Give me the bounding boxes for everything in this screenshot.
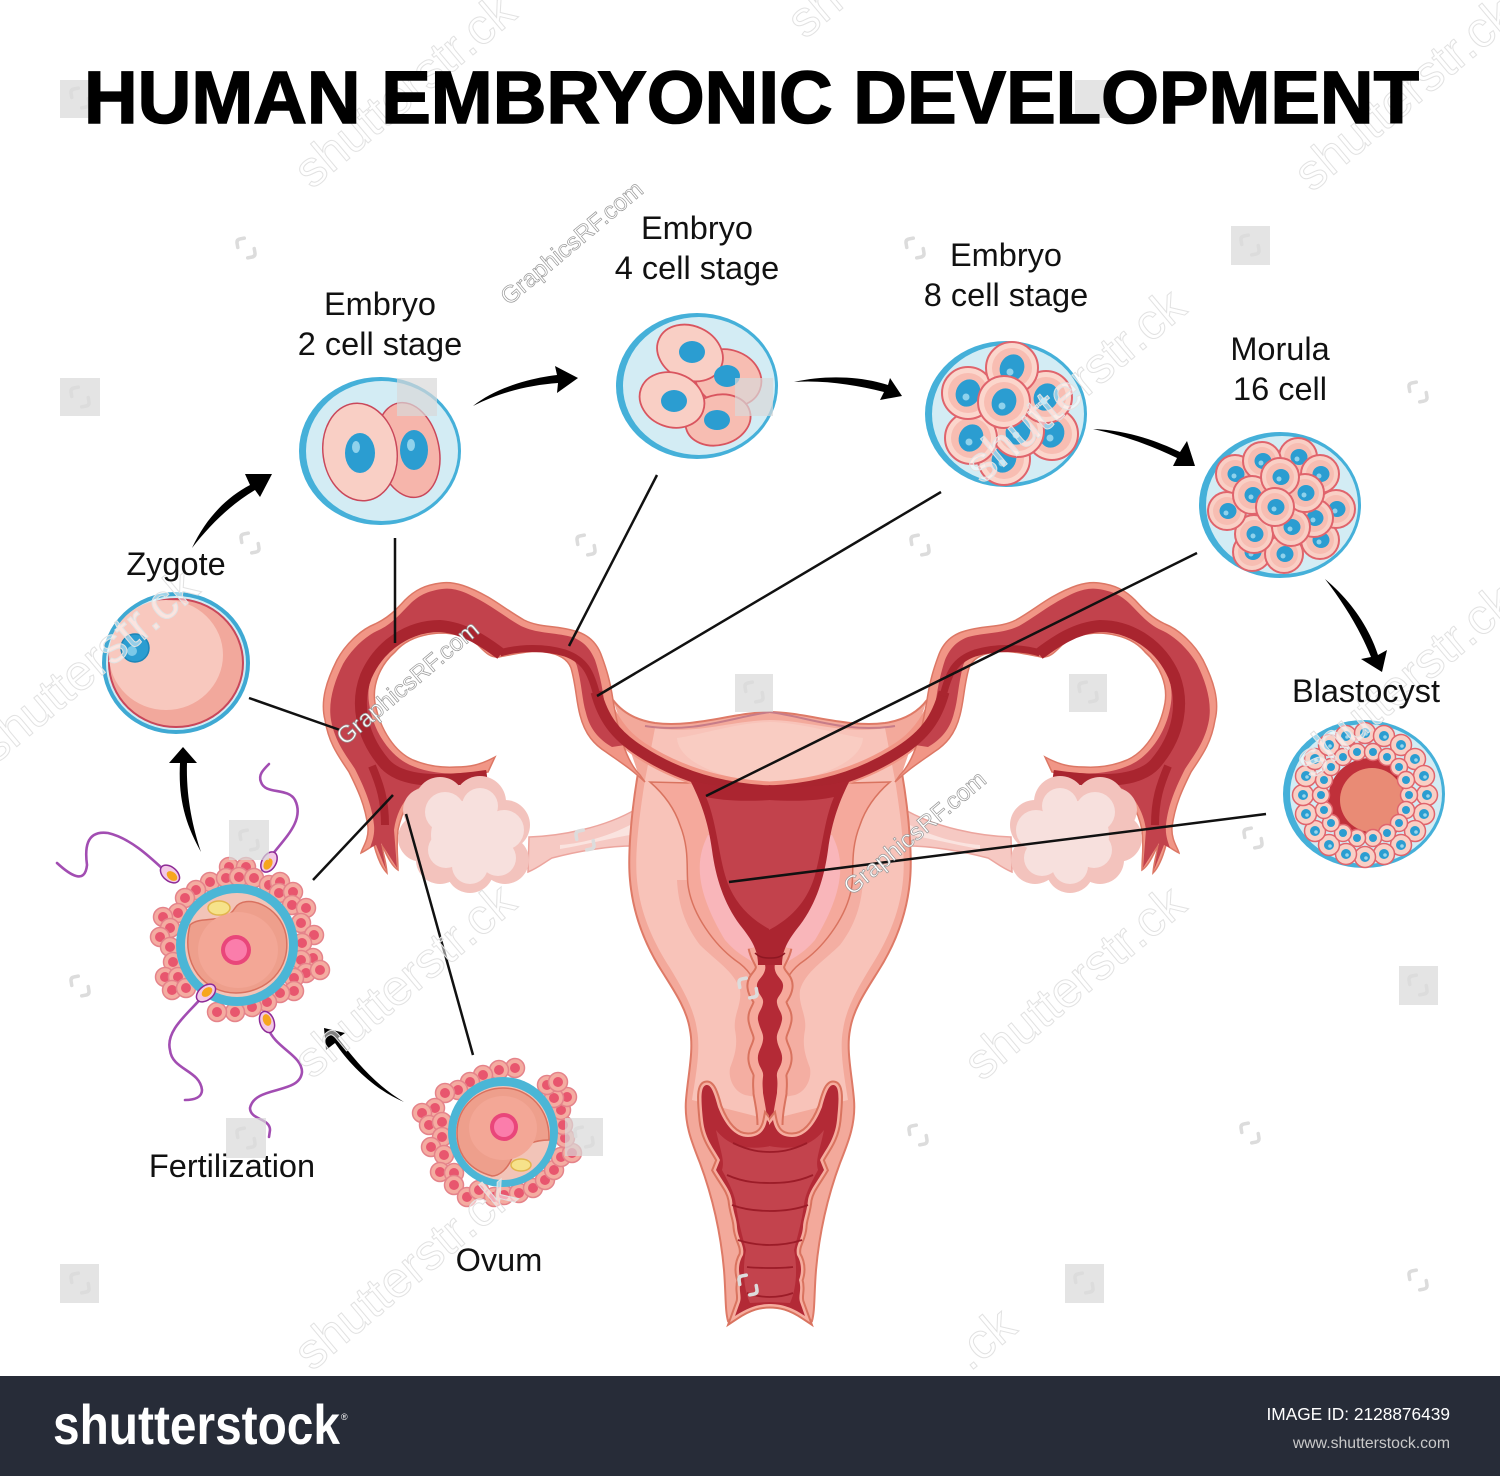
label: embryo 4 cell stage: 4 cell stage xyxy=(615,250,779,286)
label: ovum: Ovum xyxy=(456,1242,542,1278)
arrow: ovum to fertilization xyxy=(324,1028,404,1102)
label: embryo 2 cell stage: Embryo xyxy=(324,286,436,322)
label: zygote: Zygote xyxy=(126,546,226,582)
stock image watermarks: shutterstr.ck xyxy=(953,874,1196,1090)
label: embryo 2 cell stage: 2 cell stage xyxy=(298,326,462,362)
arrow: morula to blastocyst xyxy=(1325,579,1387,672)
arrow: 4 cell to 8 cell xyxy=(794,377,902,400)
arrow: 2 cell to 4 cell xyxy=(473,366,578,406)
leader lines from stages to anatomy xyxy=(249,475,1266,1055)
label: embryo 8 cell stage: 8 cell stage xyxy=(924,277,1088,313)
stock image watermarks: shutterstr.ck xyxy=(283,872,526,1088)
stock image watermarks: GraphicsRF.com xyxy=(332,616,485,751)
embryo 8 cell stage xyxy=(925,341,1087,487)
shutterstock logo text: shutterstock xyxy=(53,1393,341,1456)
title: HUMAN EMBRYONIC DEVELOPMENT xyxy=(84,56,1419,139)
morula 16 cell xyxy=(1199,432,1361,578)
fertilization egg with sperm xyxy=(57,764,330,1137)
website: www.shutterstock.com xyxy=(1292,1435,1450,1452)
ovum xyxy=(412,1058,582,1206)
registered mark: ® xyxy=(341,1412,348,1422)
stock image watermarks: GraphicsRF.com xyxy=(496,176,649,311)
embryo 2 cell stage xyxy=(299,377,461,525)
zygote xyxy=(102,592,250,734)
label: embryo 8 cell stage: Embryo xyxy=(950,237,1062,273)
label: blastocyst: Blastocyst xyxy=(1292,673,1440,709)
label: morula 16 cell: Morula xyxy=(1230,331,1331,367)
arrow: 8 cell to morula xyxy=(1093,429,1195,466)
stock image watermarks: shutterstr.ck xyxy=(953,277,1196,493)
arrow: zygote to 2 cell xyxy=(192,474,272,548)
uterus and fallopian tubes anatomy diagram xyxy=(323,583,1217,1321)
label: morula 16 cell: 16 cell xyxy=(1233,371,1327,407)
label: fertilization: Fertilization xyxy=(149,1148,315,1184)
footer bar xyxy=(0,1376,1500,1476)
image id: IMAGE ID: 2128876439 xyxy=(1266,1404,1450,1424)
stock image watermarks: shutterstr.ck xyxy=(283,1164,526,1380)
embryo 4 cell stage xyxy=(616,313,778,459)
label: embryo 4 cell stage: Embryo xyxy=(641,210,753,246)
arrow: fertilization to zygote xyxy=(169,747,201,852)
blastocyst xyxy=(1283,720,1445,868)
stock image watermarks: .ck xyxy=(941,1296,1027,1380)
stock image watermarks: GraphicsRF.com xyxy=(839,766,992,901)
